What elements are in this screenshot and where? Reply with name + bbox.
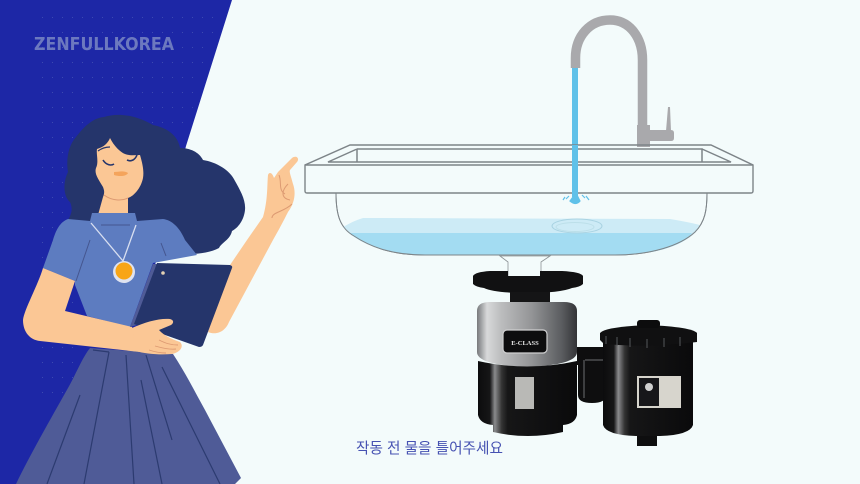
- tank label dark area: [639, 378, 659, 406]
- dotted texture: [36, 10, 222, 400]
- tank outlet: [637, 436, 657, 446]
- left arm: [23, 268, 140, 352]
- flange neck: [510, 292, 550, 304]
- pendant center: [116, 262, 132, 280]
- spout: [576, 20, 642, 128]
- pendant: [113, 261, 135, 283]
- sink: [305, 145, 753, 255]
- splash: [563, 193, 589, 204]
- tank knob: [637, 320, 660, 328]
- clipboard hole: [161, 271, 165, 275]
- woman illustration: [16, 115, 298, 484]
- basin outline: [336, 193, 707, 255]
- finger lines: [272, 175, 292, 218]
- neck and face: [96, 138, 143, 215]
- faucet handle: [650, 130, 674, 141]
- pipe: [577, 347, 613, 403]
- rim: [305, 145, 753, 193]
- basin: [336, 193, 707, 255]
- closed eyes: [103, 155, 137, 165]
- silver body: [477, 302, 577, 367]
- drain neck: [500, 256, 550, 277]
- water over sink: [572, 145, 578, 197]
- water stream: [572, 68, 578, 196]
- faucet base: [637, 125, 650, 147]
- hand: [132, 319, 182, 354]
- blue diagonal panel: [0, 0, 232, 484]
- right arm: [208, 157, 298, 333]
- clipboard: [134, 263, 232, 347]
- nose and mouth: [114, 171, 128, 176]
- hair: [64, 115, 245, 254]
- skirt pleats: [47, 350, 220, 484]
- tank lid ribs: [606, 336, 680, 348]
- brand label: [503, 330, 547, 353]
- water back: [343, 218, 700, 255]
- pipe highlight: [584, 360, 612, 398]
- brand text: E-CLASS: [511, 340, 539, 347]
- drain inner: [556, 222, 594, 232]
- black body: [478, 361, 577, 436]
- tank lid: [600, 325, 697, 346]
- skirt: [16, 348, 241, 484]
- water front: [349, 233, 692, 255]
- logo: ZENFULLKOREA: [34, 35, 174, 55]
- eyebrow: [98, 147, 110, 151]
- hand creases: [149, 340, 178, 353]
- info card: [515, 377, 534, 409]
- clipboard spine: [130, 264, 157, 327]
- tank body: [603, 340, 693, 436]
- disposer unit: [473, 271, 697, 446]
- rim lines: [305, 149, 753, 165]
- neck shadow: [104, 195, 128, 200]
- blouse fold: [76, 225, 166, 281]
- blouse: [43, 213, 197, 327]
- necklace: [91, 223, 136, 283]
- drain: [552, 219, 602, 233]
- faucet: [572, 20, 674, 196]
- faucet lever: [666, 107, 671, 131]
- tank label emblem: [645, 383, 653, 391]
- tank label: [637, 376, 681, 408]
- caption: 작동 전 물을 틀어주세요: [356, 440, 503, 457]
- flange: [473, 271, 583, 293]
